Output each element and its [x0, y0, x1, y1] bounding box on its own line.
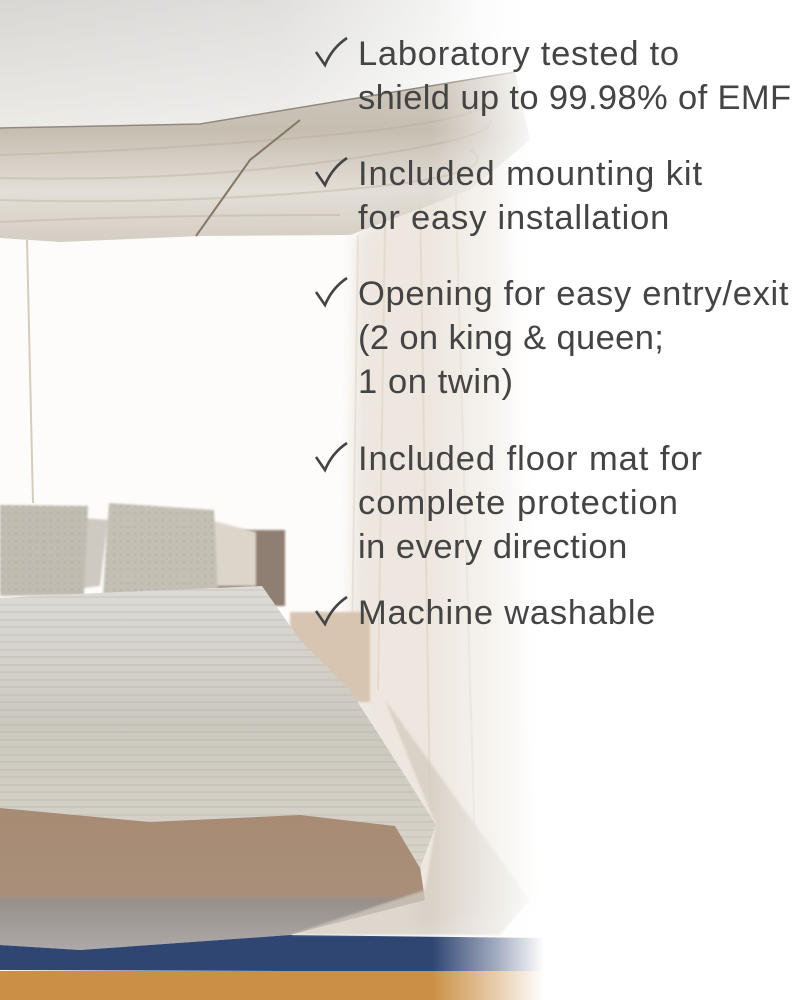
feature: EMF shielding [315, 35, 791, 117]
feature: washable [315, 594, 656, 632]
icon: check mark [315, 156, 348, 188]
corner cord [27, 240, 33, 503]
wood floor [0, 971, 545, 1000]
text: opening: (2 on king & queen; [358, 319, 664, 357]
mattress cover [0, 586, 436, 868]
drape seam [196, 120, 300, 236]
feature: mounting kit [315, 155, 703, 237]
text: opening: 1 on twin) [358, 363, 514, 401]
text: EMF shielding: shield up to 99.98% of EMF [358, 79, 791, 117]
pillows [0, 503, 256, 596]
text: floor mat: complete protection [358, 484, 679, 522]
text: floor mat: Included floor mat for [358, 440, 703, 478]
text: mounting kit [358, 155, 703, 237]
icon: check mark [315, 442, 348, 473]
headboard [215, 530, 285, 606]
box spring [0, 800, 425, 950]
text: EMF shielding: Laboratory tested to [358, 35, 680, 73]
drape folds [0, 95, 500, 222]
icon: check mark [315, 276, 348, 308]
text: floor mat: in every direction [358, 528, 628, 566]
feature: opening [315, 275, 789, 401]
text: mounting kit: for easy installation [358, 199, 670, 237]
text: EMF shielding [358, 35, 791, 117]
text: opening [358, 275, 789, 401]
drape top edge [0, 72, 515, 128]
text: washable: Machine washable [358, 594, 656, 632]
canopy side netting [350, 120, 535, 930]
text: opening: Opening for easy entry/exit [358, 275, 789, 313]
nightstand [290, 612, 370, 702]
text: floor mat [358, 440, 703, 566]
icon: check mark [315, 596, 348, 627]
top canopy drape [0, 72, 530, 242]
icon: check mark [315, 36, 348, 68]
feature: floor mat [315, 440, 703, 566]
lower netting [290, 700, 530, 935]
text: mounting kit: Included mounting kit [358, 155, 703, 193]
floor mat [0, 935, 545, 972]
